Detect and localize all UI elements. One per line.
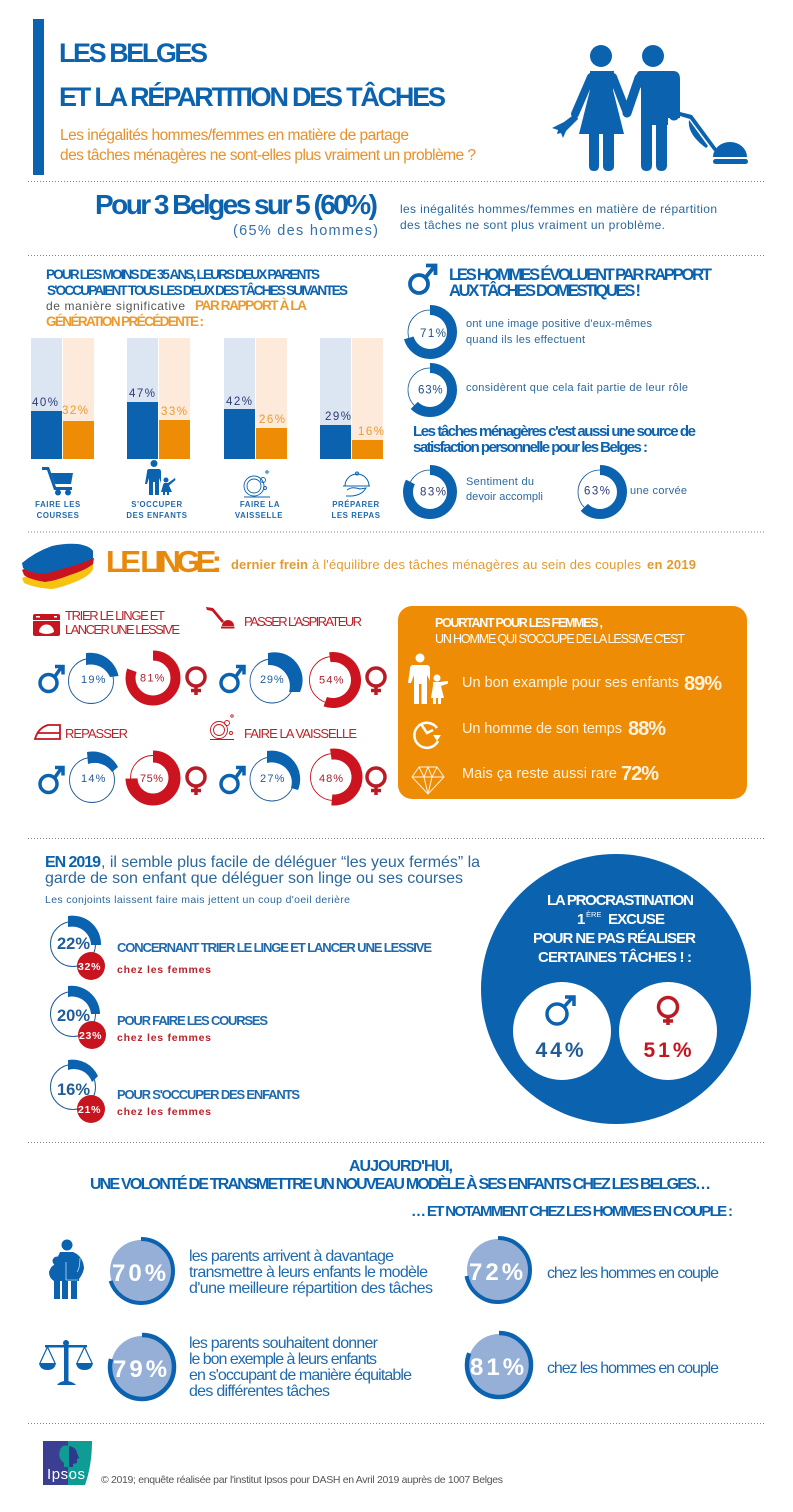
heading: POUR LES MOINS DE 35 ANS, LEURS DEUX PARENTS (46, 267, 320, 282)
donut 22% with 32%: 32% (78, 961, 101, 973)
title accent bar (33, 19, 44, 175)
text: sentiment du devoir accompli (466, 476, 543, 503)
heading: S'OCCUPAIENT TOUS LES DEUX DES TÂCHES SUIVANTES (47, 283, 348, 298)
circle heading: 1 (577, 911, 585, 928)
heading: AUX TÂCHES DOMESTIQUES ! (449, 281, 641, 300)
label: s'occuper des enfants: POUR S'OCCUPER DES ENFANTS (117, 1087, 300, 1102)
icon: washing machine (33, 614, 60, 636)
donut 16% with 21% (50, 1060, 105, 1123)
panel: faire la vaisselle (210, 715, 385, 803)
text: parents bon exemple: le bon exemple à leurs enfants (189, 1351, 377, 1368)
heading: LES HOMMES ÉVOLUENT PAR RAPPORT (449, 265, 712, 284)
donut 16% with 21%: 16% (57, 1081, 90, 1099)
panel heading: UN HOMME QUI S'OCCUPE DE LA LESSIVE C'EST (435, 632, 685, 646)
donut 54%: 54% (319, 674, 345, 686)
text: parents bon exemple: les parents souhaitent donner (189, 1335, 379, 1352)
panel: pourtant pour les femmes: 89% (684, 673, 722, 695)
section heading: le linge: dernier frein (231, 557, 308, 572)
label: s'occuper des enfants (117, 1087, 300, 1118)
panel: passer l'aspirateur (206, 607, 385, 706)
key figure 3 Belges sur 5: des tâches ne sont plus vraiment un problème. (400, 218, 665, 232)
footer (43, 1441, 503, 1486)
intro text: Les conjoints laissent faire mais jettent un coup d'oeil derière (45, 894, 350, 906)
intro text (45, 854, 480, 906)
text: image positive: ont une image positive d'eux-mêmes (466, 318, 652, 330)
label: s'occuper des enfants: chez les femmes (117, 1106, 211, 1118)
label: faire les courses (117, 1013, 268, 1044)
heading: satisfaction (413, 423, 696, 456)
donut 63% (408, 368, 452, 412)
panel heading: POURTANT POUR LES FEMMES , (435, 616, 603, 630)
icon: vacuum (206, 607, 234, 628)
donut 29% (250, 652, 303, 703)
donut 22% with 32% (50, 916, 105, 980)
heading (46, 267, 348, 329)
icon: male symbol (410, 266, 436, 293)
text: aussi rare: Mais ça reste aussi rare (462, 766, 617, 782)
heading: UNE VOLONTÉ DE TRANSMETTRE UN NOUVEAU MODÈLE À SES ENFANTS CHEZ LES BELGES… (90, 1174, 711, 1193)
subtitle: Les inégalités hommes/femmes en matière de partage (60, 127, 409, 144)
bar chart: 47% (129, 388, 157, 400)
intro text: , il semble plus facile de déléguer “les yeux fermés” la (101, 854, 480, 871)
bar labels: PRÉPARER (332, 500, 380, 509)
icon: diamond (412, 767, 444, 794)
title (59, 38, 446, 112)
text: sentiment du devoir accompli: devoir accompli (466, 491, 543, 503)
panel: trier le linge: LANCER UNE LESSIVE (65, 622, 180, 637)
male stat (513, 982, 611, 1080)
donut 81%: 81% (140, 672, 166, 684)
panel: repasser (35, 725, 205, 802)
circle heading: EXCUSE (608, 911, 665, 928)
donut 63% corvée: 63% (584, 486, 612, 498)
heading: satisfaction: Les tâches ménagères c'est aussi une source de (413, 423, 696, 440)
bar chart: 16% (358, 426, 386, 438)
donut 81% (130, 656, 176, 700)
icon: male symbol (221, 768, 244, 792)
donut 27%: 27% (260, 773, 286, 785)
label: trier le linge: chez les femmes (117, 964, 211, 976)
text: une corvée: une corvée (630, 485, 687, 497)
text: hommes en couple: chez les hommes en couple (547, 1360, 719, 1377)
bar labels (35, 500, 381, 520)
icon: iron (35, 725, 60, 739)
icon: male symbol (40, 666, 63, 692)
male stat: 44% (535, 1039, 587, 1062)
icon: shopping cart (42, 467, 73, 496)
bar labels: DES ENFANTS (126, 511, 188, 520)
section heading: le linge: à l'équilibre des tâches ménagères au sein des couples (312, 557, 642, 572)
source note: © 2019; enquête réalisée par l'institut Ipsos pour DASH en Avril 2019 auprès de 1007 Belges (101, 1474, 503, 1486)
section heading: le linge: en 2019 (647, 557, 696, 572)
circle heading: LA PROCRASTINATION (547, 892, 694, 909)
donut 27% (250, 751, 300, 801)
text: homme de son temps: Un homme de son temps (462, 721, 622, 737)
section heading: le linge: LE LINGE: (106, 544, 222, 579)
panel: pourtant pour les femmes (398, 606, 747, 799)
donut 79%: 79% (113, 1356, 170, 1383)
female stat: 51% (643, 1039, 695, 1062)
icon: couple with duster and vacuum (552, 45, 748, 171)
key figure 3 Belges sur 5: les inégalités hommes/femmes en matière de répartition (400, 202, 717, 216)
icon: female symbol (367, 668, 385, 695)
heading (449, 265, 712, 300)
label: trier le linge: CONCERNANT TRIER LE LINGE ET LANCER UNE LESSIVE (117, 940, 432, 955)
heading: PAR RAPPORT À LA (195, 298, 307, 313)
bar chart: 29% (325, 411, 353, 423)
bar labels: VAISSELLE (235, 511, 283, 520)
panel: les hommes évoluent (408, 265, 712, 514)
bar chart: 42% (226, 396, 254, 408)
bar chart: 33% (161, 406, 189, 418)
bar chart: 26% (259, 414, 287, 426)
donut 79% (110, 1335, 174, 1399)
header (33, 19, 748, 175)
label: faire les courses: chez les femmes (117, 1032, 211, 1044)
panel: trier le linge: TRIER LE LINGE ET (65, 608, 165, 623)
icon: male symbol (221, 666, 244, 692)
text: parents transmettre: transmettre à leurs enfants le modèle (189, 1264, 428, 1281)
title: LES BELGES (59, 38, 208, 68)
donut 22% with 32%: 22% (57, 935, 90, 953)
heading: de manière significative (46, 299, 185, 313)
title: ET LA RÉPARTITION DES TÂCHES (59, 81, 446, 112)
logo: Ipsos: Ipsos (47, 1466, 85, 1483)
bar chart: 40% (32, 397, 60, 409)
heading: … ET NOTAMMENT CHEZ LES HOMMES EN COUPLE : (411, 1203, 733, 1220)
donut 75% (130, 756, 176, 800)
bar labels: COURSES (37, 511, 79, 520)
text: parents transmettre (189, 1248, 433, 1297)
intro text: garde de son enfant que déléguer son linge ou ses courses (45, 870, 463, 887)
icon: folded clothes (22, 544, 94, 589)
panel: faire la vaisselle: FAIRE LA VAISSELLE (244, 726, 357, 741)
intro text: EN 2019 (45, 854, 101, 871)
panel: pourtant pour les femmes: 72% (621, 763, 659, 785)
bar labels: FAIRE LES (35, 500, 81, 509)
donut 14% (70, 751, 118, 802)
circle heading: POUR NE PAS RÉALISER (533, 930, 696, 947)
heading (90, 1158, 733, 1220)
panel: repasser: REPASSER (65, 726, 128, 741)
panel: en 2019 déléguer (45, 854, 480, 1123)
panel: procrastination circle (481, 854, 751, 1124)
key figure 3 Belges sur 5: Pour 3 Belges sur 5 (60%) (95, 189, 378, 220)
icon: parent and child (145, 460, 176, 495)
logo: Ipsos (43, 1441, 92, 1485)
female stat (619, 982, 717, 1080)
bar labels: FAIRE LA (240, 500, 280, 509)
text: parents transmettre: d'une meilleure répartition des tâches (189, 1280, 433, 1297)
donut 14%: 14% (81, 773, 107, 785)
icon: male symbol (40, 768, 63, 792)
donut 70%: 70% (112, 1260, 169, 1287)
panel: aujourd'hui (39, 1158, 733, 1400)
panel: trier le linge (33, 608, 205, 704)
text: image positive: quand ils les effectuent (466, 334, 585, 346)
icon: female symbol (367, 768, 385, 795)
donut 48% (308, 751, 360, 803)
donut 29%: 29% (260, 674, 284, 686)
donut 19% (68, 653, 118, 704)
heading: GÉNÉRATION PRÉCÉDENTE : (46, 314, 204, 329)
panel heading (435, 616, 685, 646)
icon: scales (39, 1340, 93, 1385)
icon: parent and child (408, 654, 448, 704)
donut 20% with 23%: 23% (79, 1030, 102, 1042)
text: sentiment du devoir accompli: Sentiment du (466, 476, 534, 488)
text: parents bon exemple: en s'occupant de manière équitable (189, 1367, 412, 1384)
key figure 3 Belges sur 5 (95, 189, 717, 239)
donut 20% with 23% (50, 986, 106, 1049)
donut 83%: 83% (420, 486, 448, 498)
text: parents transmettre: les parents arrivent à davantage (189, 1248, 394, 1265)
donut 48%: 48% (319, 773, 344, 785)
donut 70% (109, 1239, 173, 1303)
bar chart: 32% (62, 405, 90, 417)
circle heading (533, 892, 696, 966)
donut 83% (408, 470, 452, 514)
panel: pourtant pour les femmes: 88% (628, 718, 666, 740)
text: bon exemple: Un bon example pour ses enfants (462, 675, 679, 691)
donut 63% corvée (578, 470, 622, 514)
panel: moins de 35 ans (31, 267, 386, 520)
section heading: le linge (22, 544, 696, 589)
donut 72% (466, 1238, 530, 1302)
label: faire les courses: POUR FAIRE LES COURSES (117, 1013, 268, 1028)
circle heading: CERTAINES TÂCHES ! : (538, 948, 692, 966)
icon: serving cloche (343, 472, 370, 496)
text: image positive (466, 318, 652, 346)
icon: family (49, 1240, 84, 1299)
bar labels: S'OCCUPER (131, 500, 183, 509)
donut 71% (408, 310, 452, 354)
donut 19%: 19% (81, 674, 107, 686)
bar chart (31, 338, 386, 459)
donut 20% with 23%: 20% (57, 1007, 90, 1025)
panel: passer l'aspirateur: PASSER L'ASPIRATEUR (244, 614, 362, 629)
donut 54% (307, 654, 359, 706)
key figure 3 Belges sur 5: (65% des hommes) (233, 223, 378, 239)
icon: dishes (210, 715, 234, 740)
text: parents bon exemple: des différentes tâches (189, 1383, 330, 1400)
icon: female symbol (187, 668, 205, 695)
label: trier le linge (117, 940, 432, 976)
text: fait partie de leur rôle: considèrent que cela fait partie de leur rôle (466, 382, 688, 394)
circle heading: ÈRE (586, 910, 601, 919)
subtitle: des tâches ménagères ne sont-elles plus vraiment un problème ? (60, 147, 476, 164)
icon: female symbol (187, 768, 205, 795)
text: hommes en couple: chez les hommes en couple (547, 1265, 719, 1282)
donut 72%: 72% (469, 1259, 526, 1286)
text: parents bon exemple (189, 1335, 412, 1400)
donut 63%: 63% (418, 384, 443, 396)
heading: satisfaction: satisfaction personnelle pour les Belges : (413, 439, 648, 456)
donut 75%: 75% (140, 773, 164, 785)
heading: AUJOURD'HUI, (349, 1158, 453, 1175)
subtitle (60, 127, 476, 164)
icon: clock (414, 723, 441, 748)
bar labels: LES REPAS (331, 511, 381, 520)
donut 71%: 71% (420, 328, 448, 340)
icon: dishes (244, 471, 270, 497)
donut 81% (467, 1333, 531, 1397)
donut 16% with 21%: 21% (78, 1104, 101, 1116)
donut 81%: 81% (470, 1354, 527, 1381)
